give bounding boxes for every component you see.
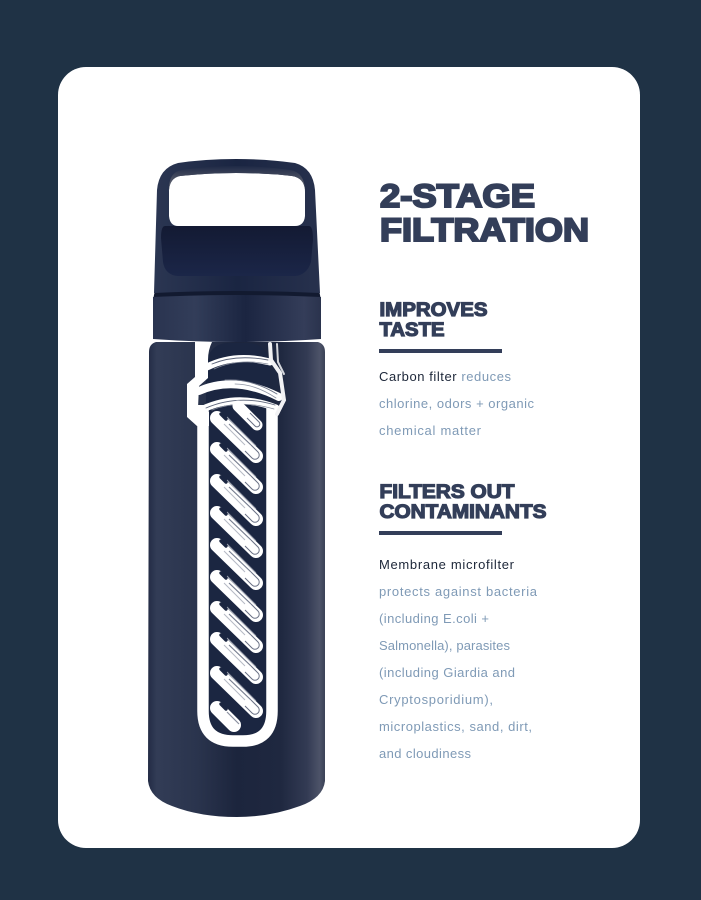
left cap block	[187, 342, 212, 426]
text: membrane microfilter: Salmonella), parasites	[379, 638, 510, 653]
text: membrane microfilter: and cloudiness	[379, 746, 472, 761]
right double strokes	[270, 344, 284, 414]
card panel	[58, 67, 640, 848]
handle recess	[161, 226, 313, 276]
heading: filters out contaminants	[380, 482, 546, 523]
gap shadow between cap and collar	[153, 290, 321, 300]
bottle collar	[153, 295, 321, 342]
lower band	[203, 401, 276, 409]
middle band	[199, 384, 279, 397]
text: membrane microfilter: (including E.coli +	[379, 611, 489, 626]
bottle illustration	[148, 159, 325, 817]
heading: improves taste: TASTE	[380, 320, 444, 341]
heading: filters out contaminants: CONTAMINANTS	[380, 502, 546, 523]
heading: improves taste: IMPROVES	[380, 300, 488, 321]
text: membrane microfilter: Cryptosporidium),	[379, 692, 493, 707]
heading: improves taste	[380, 300, 488, 341]
text: carbon filter: chemical matter	[379, 423, 482, 438]
upper band	[207, 358, 270, 367]
text: carbon filter: chlorine, odors + organic	[379, 396, 534, 411]
text: carbon filter: Carbon filter reduces	[379, 369, 512, 384]
title: FILTRATION	[380, 212, 589, 248]
divider rule	[379, 531, 502, 535]
bottle cap with handle	[154, 159, 320, 293]
filter top cap strokes	[187, 342, 284, 426]
filter coils	[217, 406, 260, 725]
title: 2-STAGE	[380, 178, 535, 214]
text: membrane microfilter: Membrane microfilter	[379, 557, 515, 572]
text: membrane microfilter	[379, 557, 538, 761]
divider rule	[379, 349, 502, 353]
text: membrane microfilter: protects against bacteria	[379, 584, 538, 599]
title	[380, 178, 589, 248]
text: membrane microfilter: microplastics, sand, dirt,	[379, 719, 532, 734]
bottle body	[148, 342, 325, 817]
text: carbon filter	[379, 369, 534, 438]
filter chamber dark fill	[206, 343, 270, 739]
text: membrane microfilter: (including Giardia and	[379, 665, 515, 680]
heading: filters out contaminants: FILTERS OUT	[380, 482, 515, 503]
handle hole bevel	[169, 166, 305, 192]
filter outline	[203, 405, 272, 741]
